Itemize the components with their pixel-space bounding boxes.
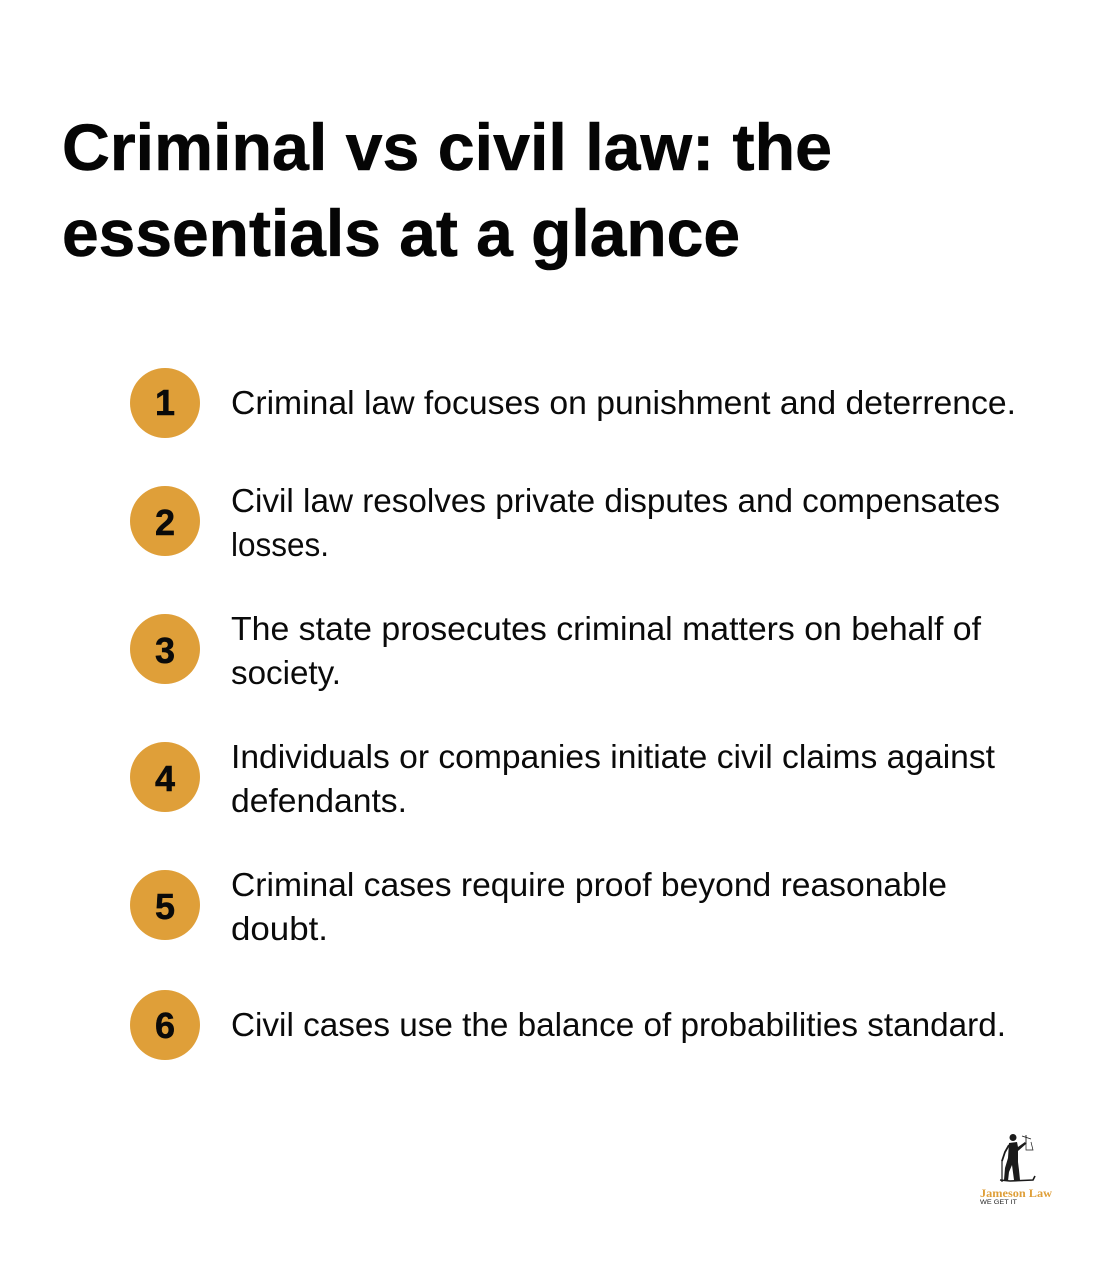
number badge 1 <box>130 368 200 438</box>
number badge 4 <box>130 742 200 812</box>
item 2 text: Civil law resolves private disputes and compensates <box>231 482 1000 519</box>
icon: lady justice figure <box>1000 1134 1035 1182</box>
item 3 text <box>231 610 982 691</box>
list item 1 <box>130 368 1016 438</box>
list item 4 <box>130 738 995 819</box>
list item 5 <box>130 866 947 947</box>
item 2 text: losses. <box>231 526 329 563</box>
item 5 text: doubt. <box>231 910 328 947</box>
item 5 text: Criminal cases require proof beyond reasonable <box>231 866 947 903</box>
number badge 3: 3 <box>155 630 175 671</box>
number badge 1: 1 <box>155 382 175 423</box>
list item 3 <box>130 610 982 691</box>
item 5 text <box>231 866 947 947</box>
number badge 6 <box>130 990 200 1060</box>
item 1 text: Criminal law focuses on punishment and deterrence. <box>231 384 1016 421</box>
item 4 text: defendants. <box>231 782 407 819</box>
list item 2 <box>130 482 1000 563</box>
number badge 6: 6 <box>155 1005 175 1046</box>
number badge 3 <box>130 614 200 684</box>
item 6 text: Civil cases use the balance of probabilities standard. <box>231 1006 1006 1043</box>
item 2 text <box>231 482 1000 563</box>
number badge 5 <box>130 870 200 940</box>
logo: Jameson Law <box>980 1134 1053 1206</box>
item 3 text: The state prosecutes criminal matters on behalf of <box>231 610 982 647</box>
item 3 text: society. <box>231 654 341 691</box>
title: essentials at a glance <box>62 196 740 270</box>
number badge 4: 4 <box>155 758 175 799</box>
number badge 2 <box>130 486 200 556</box>
list item 6 <box>130 990 1006 1060</box>
number badge 5: 5 <box>155 886 175 927</box>
item 4 text <box>231 738 995 819</box>
title <box>62 110 832 270</box>
item 4 text: Individuals or companies initiate civil claims against <box>231 738 995 775</box>
logo tagline: WE GET IT <box>980 1199 1017 1206</box>
number badge 2: 2 <box>155 502 175 543</box>
title: Criminal vs civil law: the <box>62 110 832 184</box>
logo wordmark: Jameson Law <box>980 1188 1053 1200</box>
